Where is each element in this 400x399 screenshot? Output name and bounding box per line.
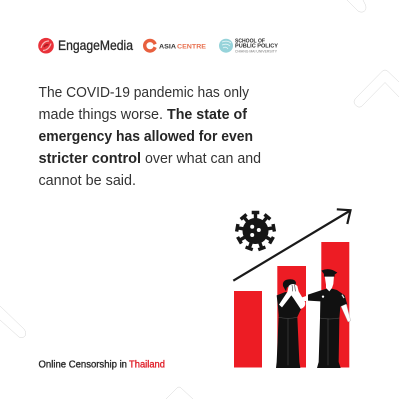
main text block: stricter control xyxy=(38,150,141,167)
logo: Asia Centre: ASIA xyxy=(159,44,176,51)
footer label: Thailand xyxy=(129,360,165,371)
logo: Asia Centre xyxy=(145,40,206,51)
icon: virus xyxy=(235,211,276,251)
logo: Asia Centre: CENTRE xyxy=(177,44,206,51)
logo: EngageMedia xyxy=(38,38,133,54)
main text block: emergency has allowed for even xyxy=(38,128,253,145)
footer label: Online Censorship in xyxy=(38,360,127,371)
figure: man covering his mouth xyxy=(276,279,305,368)
logo: School of Public Policy: SCHOOL OF xyxy=(235,38,266,44)
main text block: made things worse. xyxy=(38,106,163,123)
main text block: The COVID-19 pandemic has only xyxy=(38,84,249,101)
bar chart xyxy=(234,242,349,368)
logo: School of Public Policy: CHIANG MAI UNIVERSITY xyxy=(235,49,278,53)
arrow: upward trend xyxy=(233,209,350,281)
logo row xyxy=(38,38,278,54)
main text block xyxy=(38,84,261,189)
figure: police officer xyxy=(302,269,351,368)
main text block: The state of xyxy=(167,106,248,123)
logo: School of Public Policy: PUBLIC POLICY xyxy=(235,44,278,50)
logo: EngageMedia: EngageMedia xyxy=(58,38,133,53)
main text block: over what can and xyxy=(145,150,261,167)
logo: School of Public Policy xyxy=(219,38,278,53)
main text block: cannot be said. xyxy=(38,172,136,189)
